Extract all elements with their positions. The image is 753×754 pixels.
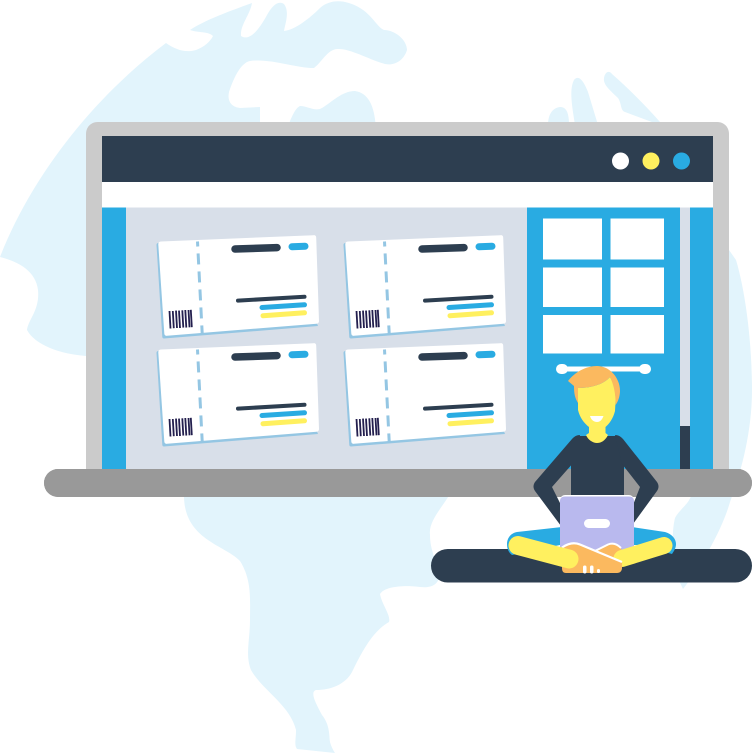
- shorts: [507, 527, 676, 555]
- base bar front edge: [44, 469, 752, 497]
- ticket 1: [156, 235, 319, 338]
- window button: yellow: [642, 152, 660, 170]
- hair: [568, 366, 620, 405]
- back foot: [593, 544, 624, 566]
- laptop base bar: [44, 469, 752, 497]
- ticket 2: [344, 235, 506, 338]
- door handle: [556, 364, 651, 374]
- right arm: [615, 435, 658, 524]
- torso: [571, 436, 624, 505]
- browser address bar: [102, 182, 713, 208]
- window button: blue: [673, 152, 690, 170]
- toes: [583, 566, 600, 574]
- right panel: building door: [527, 208, 713, 470]
- neck and face: [578, 377, 616, 443]
- ticket list panel: [126, 208, 527, 470]
- smile: [590, 416, 604, 422]
- browser title bar: [102, 136, 713, 182]
- floor mat: [431, 549, 752, 582]
- person sitting with laptop: [507, 366, 676, 574]
- left sidebar: [102, 208, 126, 470]
- right leg: [622, 546, 664, 558]
- scrollbar: [680, 208, 690, 470]
- left leg: [518, 546, 569, 559]
- ticket 4: [344, 343, 506, 446]
- door windows: [543, 218, 664, 354]
- laptop logo: [584, 519, 610, 528]
- left arm: [534, 435, 580, 526]
- big screen frame: [86, 122, 729, 469]
- window button: white: [612, 152, 629, 170]
- laptop: [560, 495, 634, 550]
- front foot: [562, 543, 622, 573]
- ticket 3: [156, 343, 319, 446]
